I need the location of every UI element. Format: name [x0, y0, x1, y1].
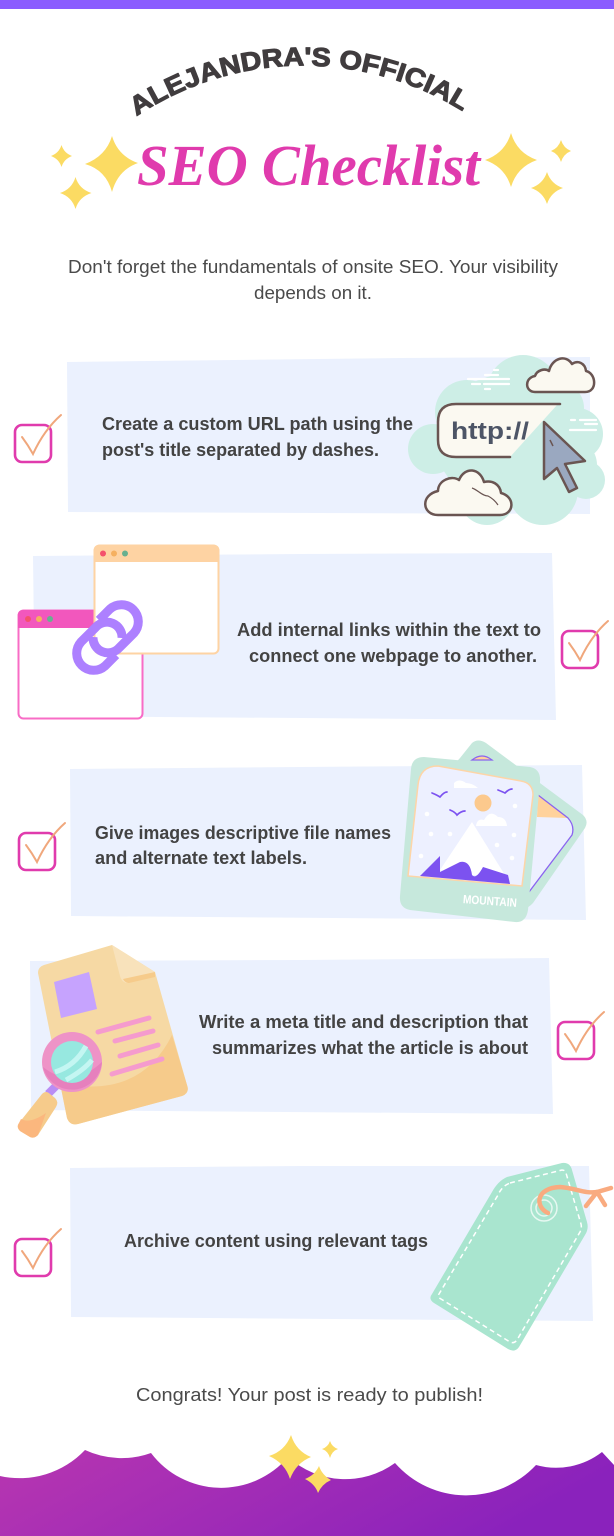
checkbox 5 — [15, 1229, 61, 1276]
step 2 text — [237, 620, 541, 666]
step 3 text: Give images descriptive file names — [95, 823, 391, 843]
step 1 text — [102, 414, 413, 460]
panel background 2 — [33, 553, 556, 720]
pink window — [18, 610, 143, 718]
chain link — [77, 605, 138, 670]
title: SEO Checklist: SEO Checklist — [137, 133, 482, 198]
intro text: Don't forget the fundamentals of onsite SEO. Your visibility — [68, 257, 558, 277]
orange window — [94, 545, 219, 654]
top bar — [0, 0, 614, 9]
panel: step 1 custom URL — [15, 355, 605, 525]
panel background 3 — [70, 765, 586, 920]
icon: linked browser windows — [18, 545, 219, 718]
intro text: depends on it. — [254, 283, 372, 303]
checkbox 3 — [19, 823, 65, 870]
icon: footer sparkles — [269, 1435, 338, 1493]
title: arched heading: ALEJANDRA'S OFFICIAL — [133, 47, 464, 116]
icon: mountain photo cards: MOUNTAIN — [463, 892, 517, 910]
step 3 text: and alternate text labels. — [95, 848, 307, 868]
step 1 text: Create a custom URL path using the — [102, 414, 413, 434]
step 4 text: Write a meta title and description that — [199, 1012, 528, 1032]
icon: http browser bar with clouds and cursor: http:// — [451, 418, 529, 445]
icon: green tag — [430, 1163, 611, 1351]
checkbox 1 — [15, 415, 61, 462]
panel: step 5 tags — [15, 1163, 611, 1351]
intro text — [68, 257, 558, 303]
step 4 text: summarizes what the article is about — [212, 1038, 528, 1058]
step 3 text — [95, 823, 391, 868]
panel background 5 — [70, 1166, 593, 1321]
panel background 1 — [67, 357, 590, 514]
icon: document with magnifier — [18, 945, 188, 1138]
icon: mountain photo cards — [400, 740, 587, 922]
icon: title sparkles left — [51, 136, 138, 209]
checkbox 2 — [562, 621, 608, 668]
footer: gradient scalloped band — [0, 1450, 614, 1536]
icon: title sparkles right — [485, 133, 571, 204]
panel: step 4 meta title — [18, 945, 604, 1138]
step 5 text: Archive content using relevant tags — [124, 1231, 428, 1251]
icon: http browser bar with clouds and cursor — [408, 355, 605, 525]
checkbox 4 — [558, 1012, 604, 1059]
step 1 text: post's title separated by dashes. — [102, 440, 379, 460]
step 2 text: Add internal links within the text to — [237, 620, 541, 640]
panel: step 3 image names — [19, 740, 587, 922]
panel: step 2 internal links — [18, 545, 608, 720]
closing text: Congrats! Your post is ready to publish! — [136, 1385, 483, 1405]
step 2 text: connect one webpage to another. — [249, 646, 537, 666]
panel background 4 — [30, 958, 553, 1114]
step 4 text — [199, 1012, 528, 1058]
